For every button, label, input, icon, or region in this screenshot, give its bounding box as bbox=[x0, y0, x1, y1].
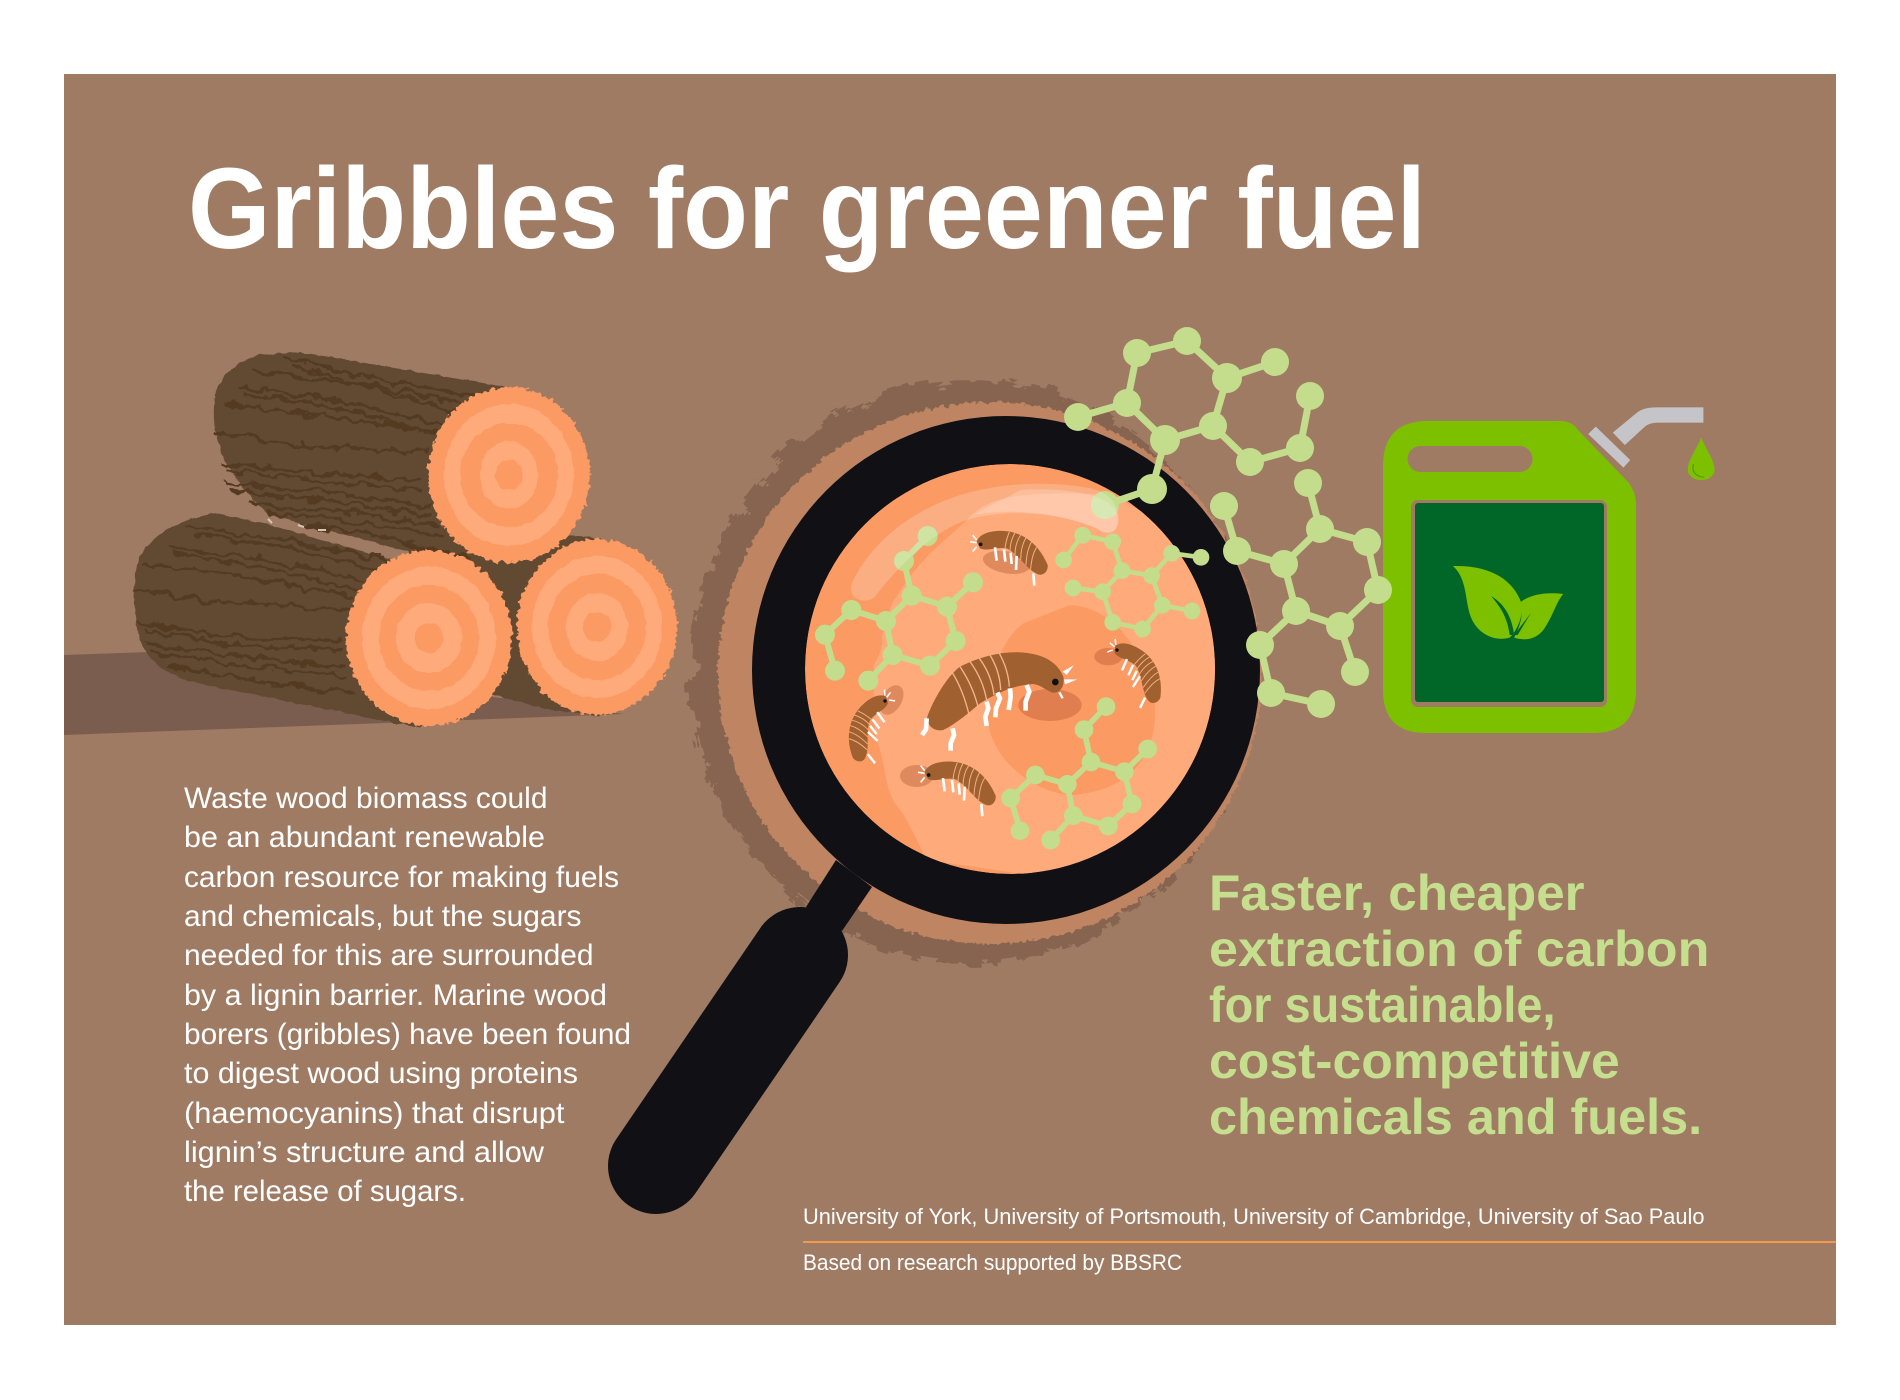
body text: (haemocyanins) that disrupt bbox=[184, 1097, 565, 1130]
log: top bark bbox=[214, 352, 506, 560]
molecule: lens left bbox=[815, 526, 983, 691]
body text: be an abundant renewable bbox=[184, 821, 545, 854]
body text: carbon resource for making fuels bbox=[184, 861, 619, 894]
green takeaway text: extraction of carbon bbox=[1209, 921, 1709, 977]
body text: lignin’s structure and allow bbox=[184, 1136, 544, 1169]
body text: Waste wood biomass could bbox=[184, 782, 548, 815]
magnifying glass bbox=[656, 416, 1260, 1166]
green takeaway text bbox=[1209, 865, 1709, 1145]
green takeaway text: Faster, cheaper bbox=[1209, 865, 1585, 921]
green takeaway text: for sustainable, bbox=[1209, 977, 1556, 1033]
jerry can bbox=[1383, 421, 1636, 733]
molecule: lens bottom right bbox=[1001, 697, 1157, 849]
gribble: bottom left bbox=[900, 761, 996, 816]
log end: right bbox=[517, 539, 677, 715]
floor shadow bbox=[64, 652, 624, 735]
molecule: lens top right bbox=[1055, 527, 1209, 637]
log: back right bbox=[400, 520, 600, 716]
icon: leaves bbox=[1453, 566, 1563, 639]
lens highlight bbox=[851, 484, 1119, 601]
icon: fuel drop bbox=[1688, 437, 1715, 480]
jerry can spout bbox=[1588, 407, 1703, 468]
body text: needed for this are surrounded bbox=[184, 939, 594, 972]
body text: to digest wood using proteins bbox=[184, 1057, 578, 1090]
molecule: outer upper bbox=[1064, 327, 1324, 519]
molecule: outer lower bbox=[1210, 469, 1392, 718]
footer: universities: University of York, University of Portsmouth, University of Cambridge, University of Sao Paulo bbox=[803, 1204, 1704, 1229]
illustration: stacked logs bbox=[134, 352, 677, 728]
body text: borers (gribbles) have been found bbox=[184, 1018, 631, 1051]
gribble: right bbox=[1089, 634, 1176, 714]
gribble: left bbox=[831, 681, 919, 772]
log: bottom left bark bbox=[134, 513, 500, 728]
green takeaway text: cost-competitive bbox=[1209, 1033, 1620, 1089]
gribble: top bbox=[970, 531, 1048, 586]
body text bbox=[184, 782, 631, 1208]
gribble: large centre bbox=[922, 652, 1082, 751]
title: Gribbles for greener fuel bbox=[188, 145, 1426, 273]
log end: left bbox=[346, 550, 512, 726]
lens contents bbox=[805, 464, 1215, 874]
wood stump slice bbox=[692, 380, 1262, 964]
body text: by a lignin barrier. Marine wood bbox=[184, 979, 607, 1012]
footer: funding: Based on research supported by BBSRC bbox=[803, 1250, 1182, 1275]
green takeaway text: chemicals and fuels. bbox=[1209, 1089, 1702, 1145]
body text: the release of sugars. bbox=[184, 1175, 466, 1208]
log end: top bbox=[428, 387, 590, 563]
body text: and chemicals, but the sugars bbox=[184, 900, 582, 933]
lens wood texture bbox=[805, 464, 1215, 874]
